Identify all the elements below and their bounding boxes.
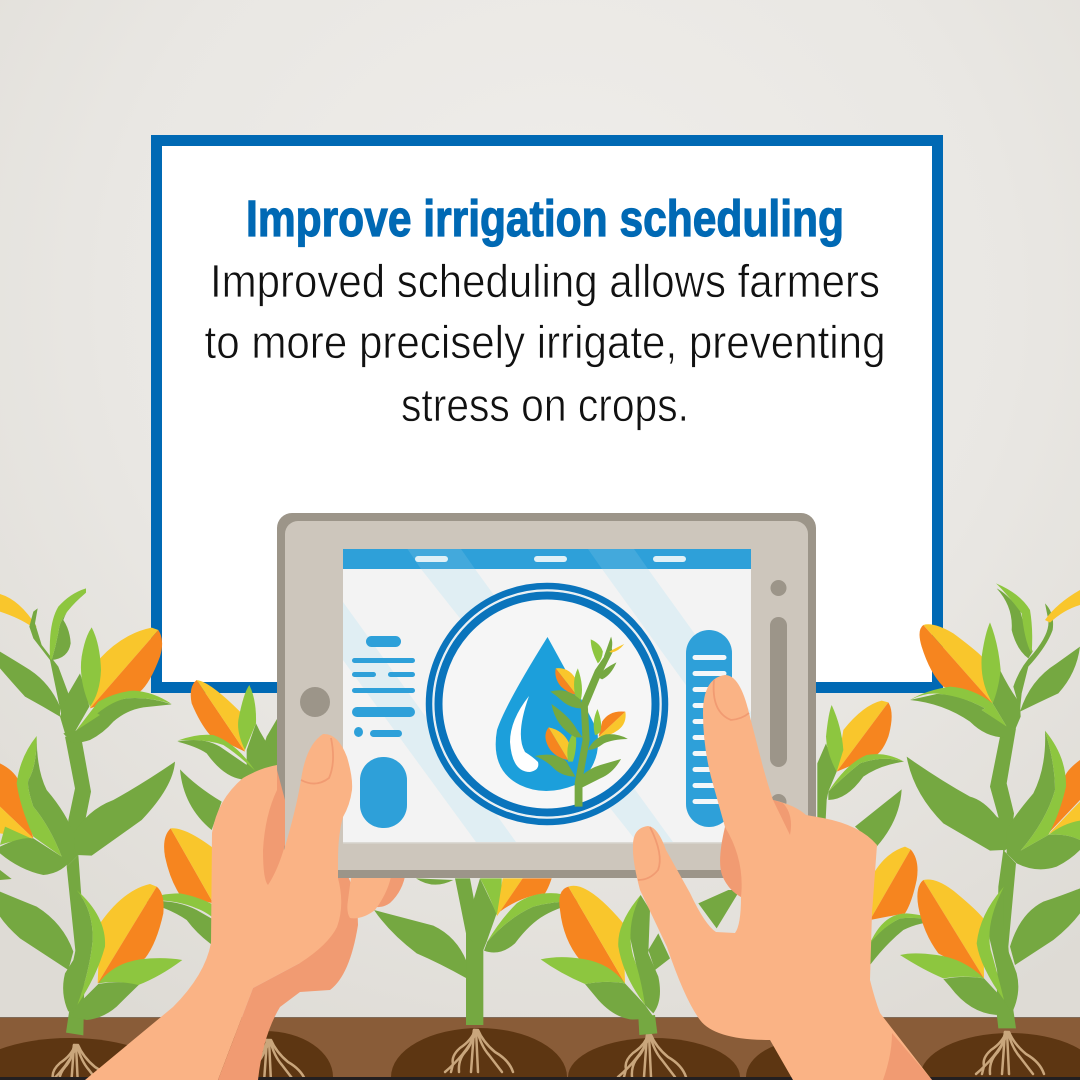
- plant: second row left: [142, 680, 277, 950]
- wrist shadow: [218, 963, 300, 1080]
- circular badge: [429, 586, 665, 822]
- panel: text card: [156, 140, 938, 688]
- body text: to more precisely irrigate, preventing: [204, 316, 886, 368]
- side slider: [770, 617, 787, 767]
- finger creases: [638, 680, 749, 880]
- screen: [343, 549, 751, 844]
- icon: water drop: [496, 637, 598, 791]
- header pills: [415, 556, 686, 562]
- tablet: [277, 513, 816, 878]
- plant: centre: [374, 878, 582, 1025]
- camera dot: [770, 580, 786, 596]
- lower dot: [770, 794, 786, 810]
- icon: crop plant: [535, 637, 628, 807]
- plant: second row right: [817, 701, 940, 965]
- left hand: [85, 734, 352, 1080]
- body text: Improved scheduling allows farmers: [210, 255, 880, 307]
- body text: stress on crops.: [401, 379, 689, 431]
- thumb crease: [301, 738, 333, 784]
- right scale: [686, 630, 732, 827]
- plant: far right: [900, 583, 1080, 1028]
- home button: [300, 687, 330, 717]
- header bar: [343, 549, 751, 569]
- knuckle shadow: [773, 800, 791, 835]
- wrist shadow: [883, 1033, 932, 1080]
- plant: centre right: [541, 886, 740, 1035]
- roots: [45, 1030, 1044, 1080]
- heading: Improve irrigation scheduling: [246, 190, 844, 247]
- left panel controls: [352, 636, 415, 828]
- right hand: [633, 675, 932, 1080]
- body text: [204, 255, 886, 431]
- soil: [0, 1017, 1080, 1080]
- glare stripes: [343, 569, 751, 842]
- soil base strip: [0, 1077, 1080, 1080]
- palm shadow: [720, 827, 742, 897]
- thumb shadow: [263, 770, 285, 885]
- plant: far left: [0, 588, 182, 1035]
- left hand fingers behind tablet: [300, 870, 406, 992]
